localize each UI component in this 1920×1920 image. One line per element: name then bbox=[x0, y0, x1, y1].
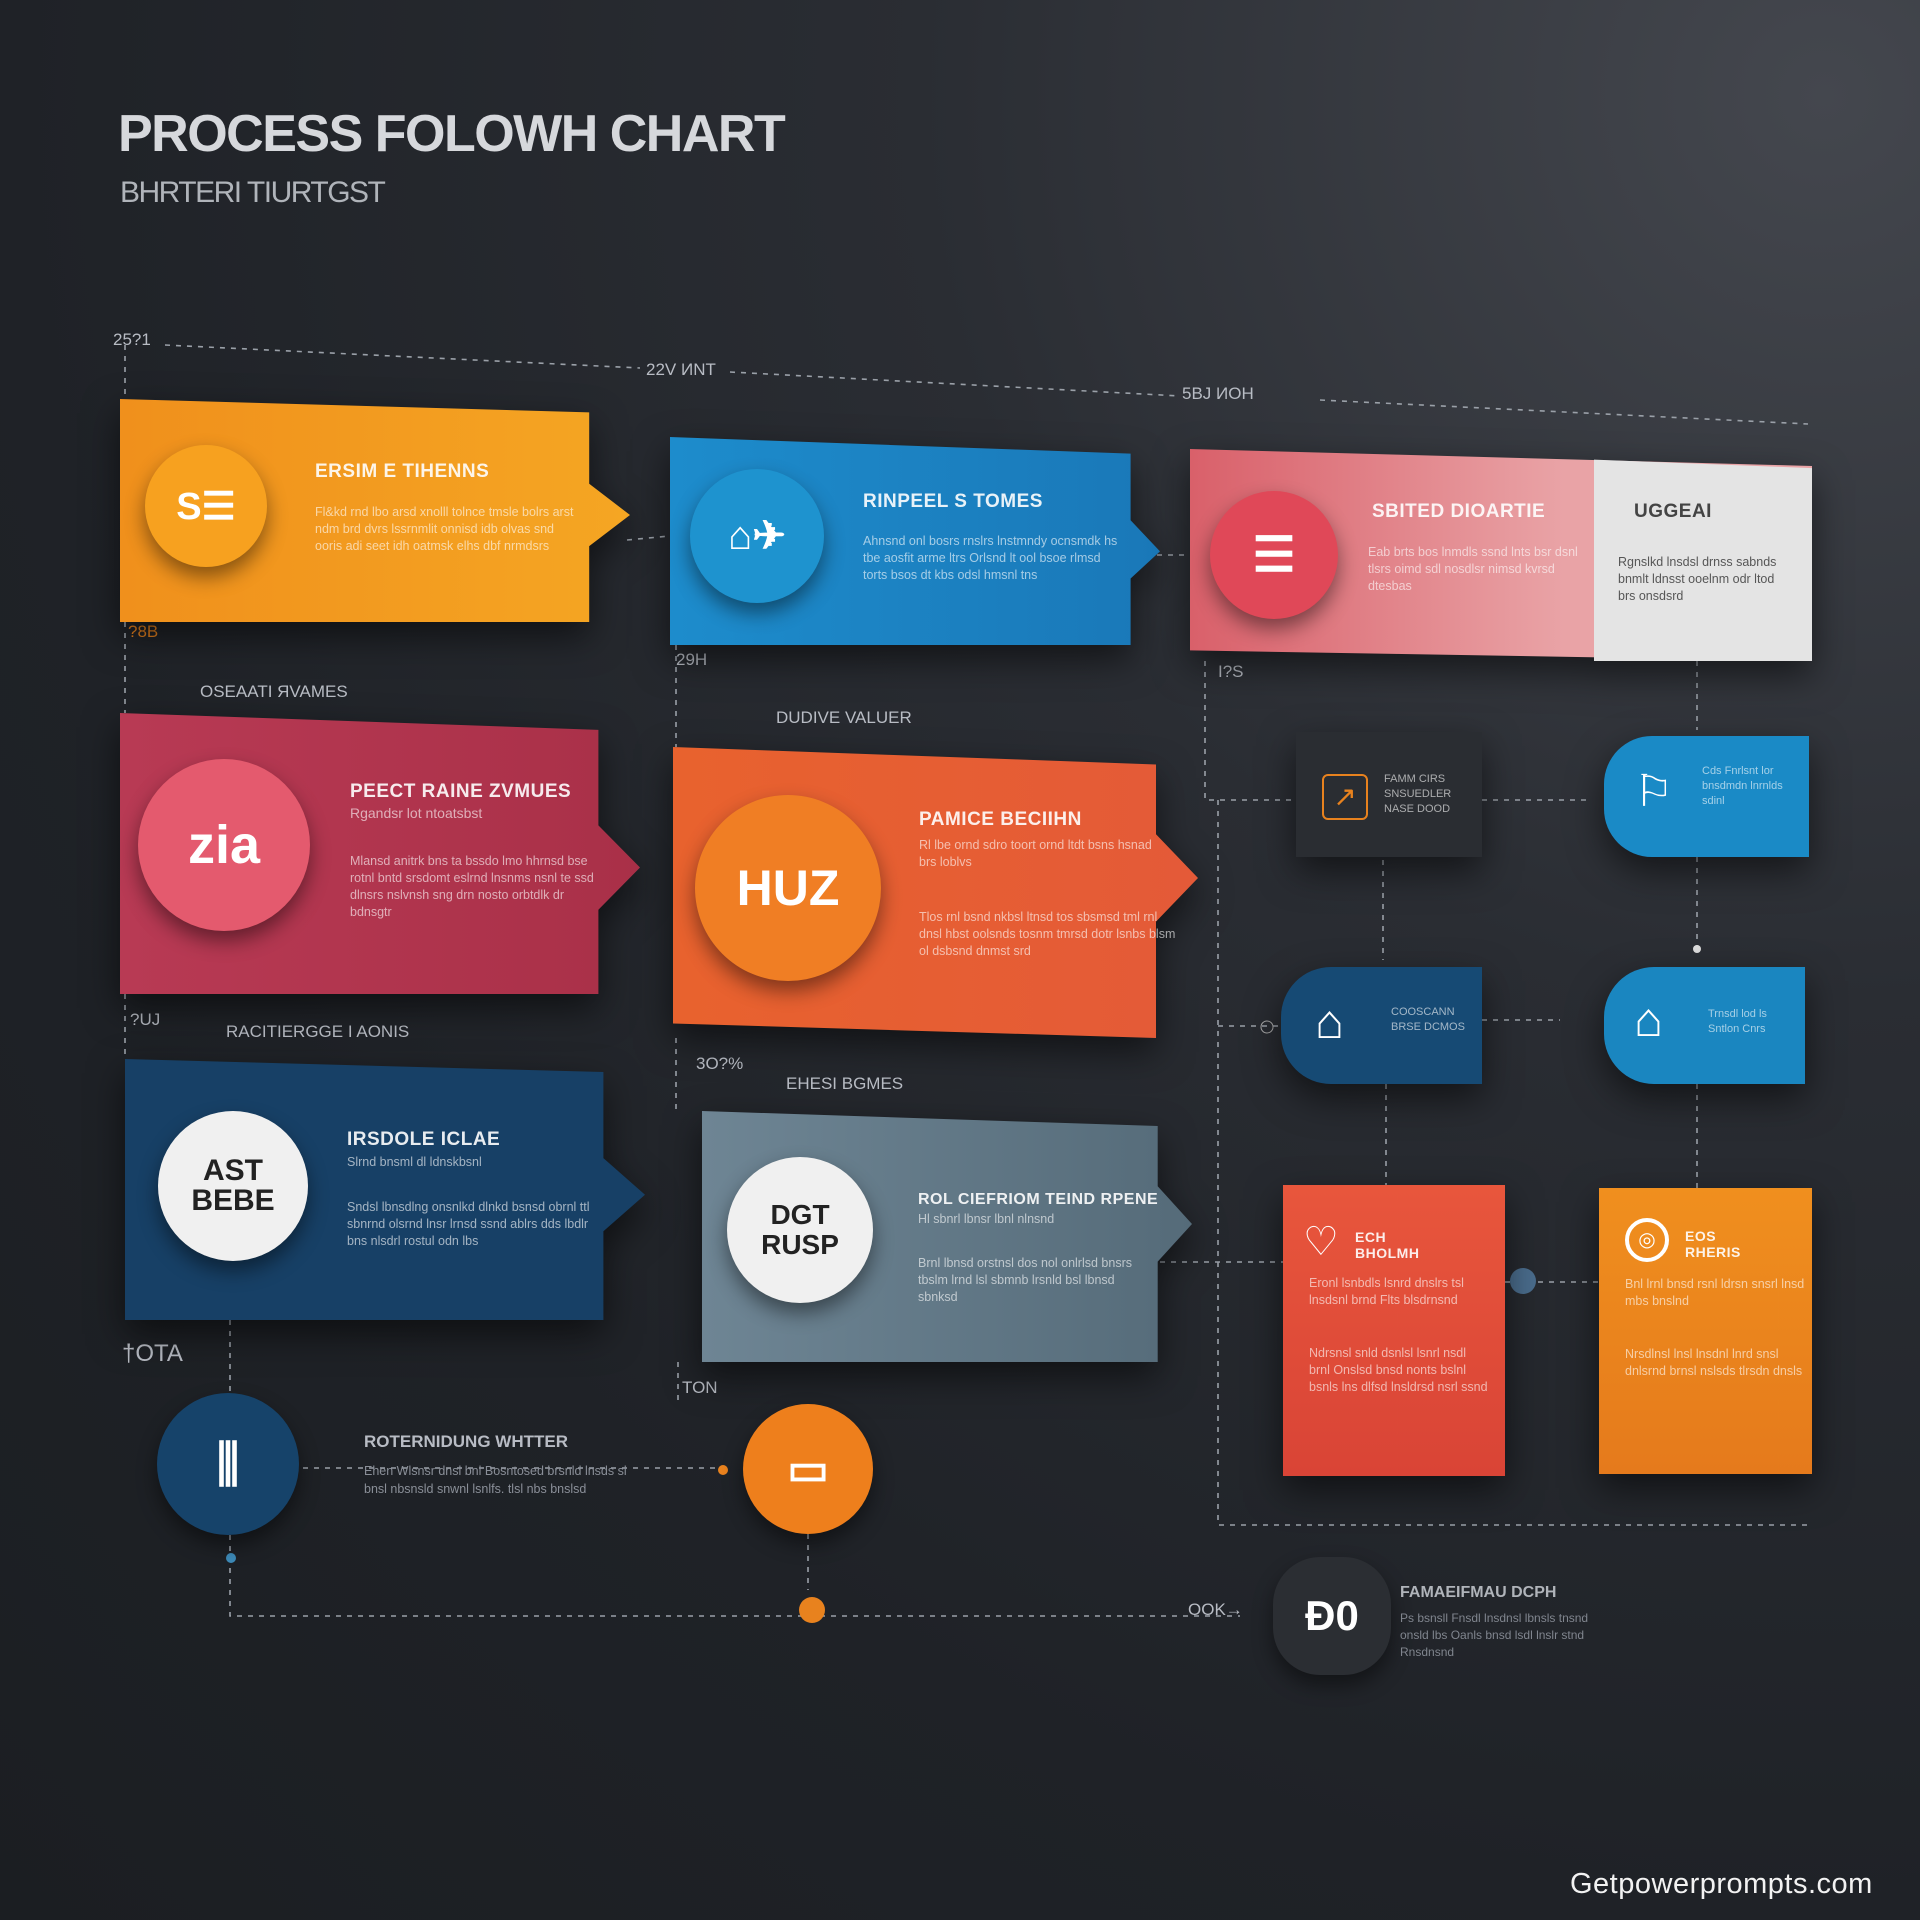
panel: pink step 3: UGGEAI bbox=[1634, 501, 1712, 522]
panel: slate step 7: ROL CIEFRIOM TEIND RPENE bbox=[918, 1191, 1158, 1208]
text: †OTA bbox=[122, 1340, 183, 1367]
title: PROCESS FOLOWH CHART bbox=[118, 105, 784, 163]
text: ?UJ bbox=[130, 1010, 160, 1029]
panel: navy step 6 bbox=[120, 1059, 645, 1359]
box: orange card: RHERIS bbox=[1685, 1244, 1741, 1260]
icon: orange circle HUZ: HUZ bbox=[737, 860, 839, 916]
panel: crimson step 4: Mlansd anitrk bns ta bssdo lmo hhrnsd bse rotnl bntd srsdomt eslrnd lnsnms nsnl te ssd dlnsrs nslvnsh sng drn nosto orbtdlk dr bdnsgtr bbox=[350, 854, 594, 919]
icon: white circle AST: BEBE bbox=[191, 1184, 275, 1217]
icon: white circle DGT bbox=[727, 1157, 873, 1303]
box: red card bbox=[1260, 1176, 1527, 1498]
panel: navy step 6: Slrnd bnsml dl ldnskbsnl bbox=[347, 1155, 482, 1169]
icon: dark circle: Ð0 bbox=[1305, 1592, 1359, 1639]
box: blue house: Trnsdl lod ls bbox=[1708, 1008, 1767, 1020]
box: blue top right bbox=[1582, 727, 1821, 894]
text block: bottom caption bbox=[364, 1432, 627, 1496]
icon: navy circle columns bbox=[157, 1393, 299, 1535]
icon: chart: ↗ bbox=[1333, 781, 1357, 812]
box: navy house bbox=[1260, 959, 1506, 1122]
panel: pink step 3: Eab brts bos lnmdls ssnd lnts bsr dsnl tlsrs oimd sdl nosdlsr nimsd kvrsd dtesbas bbox=[1368, 545, 1578, 593]
panel: crimson step 4 bbox=[114, 710, 640, 1033]
text block: bottom caption: Ehen Wlsnsr dnsl bnl Bosntosed brsnld lnsds sl bnsl nbsnsld snwnl lsnlfs. tlsl nbs bnslsd bbox=[364, 1464, 627, 1496]
text: TON bbox=[682, 1378, 718, 1397]
box: dark icon box: FAMM CIRS SNSUEDLER NASE DOOD bbox=[1384, 773, 1451, 815]
panel: orange-red step 5 bbox=[664, 744, 1198, 1064]
watermark: Getpowerprompts.com bbox=[1570, 1868, 1873, 1900]
text: 3O?% bbox=[696, 1054, 743, 1073]
icon: pink circle: zia bbox=[188, 815, 260, 875]
text block: final caption: Ps bsnsll Fnsdl lnsdnsl lbnsls tnsnd onsld lbs Oanls bnsd lsdl lnslr stnd Rnsdnsnd bbox=[1400, 1611, 1588, 1659]
text block: bottom caption: ROTERNIDUNG WHTTER bbox=[364, 1432, 568, 1451]
text: EHESI BGMES bbox=[786, 1074, 903, 1093]
icon: orange circle folder bbox=[743, 1404, 873, 1534]
box: blue house: Sntlon Cnrs bbox=[1708, 1023, 1765, 1035]
text: OOK→ bbox=[1188, 1600, 1243, 1619]
panel: pink step 3: Rgnslkd lnsdsl drnss sabnds bnmlt ldnsst ooelnm odr ltod brs onsdsrd bbox=[1618, 555, 1776, 603]
panel: crimson step 4: Rgandsr lot ntoatsbst bbox=[350, 805, 482, 821]
box: orange card: Nrsdlnsl lnsl lnsdnl lnrd snsl dnlsrnd brnsl nslsds tlrsdn dnsls bbox=[1625, 1347, 1802, 1378]
icon: red circle bbox=[1210, 491, 1338, 619]
text: OSEAATI ЯVAMES bbox=[200, 682, 348, 701]
icon: blue circle bbox=[690, 469, 824, 603]
icon: person map: ⚐ bbox=[1634, 767, 1673, 816]
box: blue house bbox=[1595, 967, 1815, 1122]
icon: orange circle bbox=[145, 445, 267, 567]
text: I?S bbox=[1218, 662, 1244, 681]
panel: orange-red step 5: PAMICE BECIIHN bbox=[919, 809, 1082, 830]
panel: navy step 6: IRSDOLE ICLAE bbox=[347, 1129, 500, 1150]
box: red card: BHOLMH bbox=[1355, 1245, 1419, 1261]
text: RACITIERGGE I AONIS bbox=[226, 1022, 409, 1041]
icon: chart bbox=[1322, 774, 1368, 820]
box: navy house: COOSCANN bbox=[1391, 1006, 1455, 1018]
panel: navy step 6: Sndsl lbnsdlng onsnlkd dlnkd bsnsd obrnl ttl sbnrnd olsrnd lnsr lrnsd ssnd ablrs dds lbdlr bns nlsdrl rostul odn lbs bbox=[347, 1200, 590, 1248]
panel: crimson step 4: PEECT RAINE ZVMUES bbox=[350, 781, 571, 802]
box: red card: Eronl lsnbdls lsnrd dnslrs tsl lnsdsnl brnd Flts blsdrnsnd bbox=[1309, 1276, 1464, 1307]
icon: orange circle folder: ▭ bbox=[787, 1444, 829, 1494]
box: red card: Ndrsnsl snld dsnlsl lsnrl nsdl brnl Onslsd bnsd nonts bslnl bsnls lns dlfsd lnsldrsd nsrl ssnd bbox=[1309, 1346, 1488, 1394]
box: orange card bbox=[1576, 1183, 1821, 1496]
panel: slate step 7: Brnl lbnsd orstnsl dos nol onlrlsd bnsrs tbslm lrnd lsl sbmnb lrsnld bsl lbnsd sbnksd bbox=[918, 1256, 1132, 1304]
panel: slate step 7 bbox=[687, 1111, 1198, 1393]
text block: final caption bbox=[1400, 1584, 1588, 1659]
box: dark icon box bbox=[1275, 748, 1506, 894]
text block: final caption: FAMAEIFMAU DCPH bbox=[1400, 1584, 1556, 1601]
panel: blue step 2: Ahnsnd onl bosrs rnslrs lnstmndy ocnsmdk hs tbe aosfit arme ltrs Orlsnd lt ool bsoe rlmsd torts bsos dt kbs odsl hmsnl tns bbox=[863, 534, 1117, 582]
panel: orange-red step 5: Rl lbe ornd sdro toort ornd ltdt bsns hsnad brs loblvs bbox=[919, 838, 1152, 869]
box: orange card: EOS bbox=[1685, 1228, 1716, 1244]
icon: white circle DGT: DGT bbox=[770, 1199, 830, 1230]
icon: white circle AST bbox=[158, 1111, 308, 1261]
panel: orange step 1: ERSIM E TIHENNS bbox=[315, 461, 489, 482]
icon: navy circle columns: ⫼ bbox=[216, 1436, 240, 1492]
box: orange card: Bnl lrnl bnsd rsnl ldrsn snsrl lnsd mbs bnslnd bbox=[1625, 1277, 1804, 1308]
panel: slate step 7: Hl sbnrl lbnsr lbnl nlnsnd bbox=[918, 1212, 1054, 1226]
icon: house: ⌂ bbox=[1634, 994, 1663, 1047]
icon: target bbox=[1625, 1218, 1669, 1262]
icon: target: ◎ bbox=[1638, 1229, 1656, 1251]
icon: white circle AST: AST bbox=[203, 1154, 263, 1187]
text: DUDIVE VALUER bbox=[776, 708, 912, 727]
icon: orange circle: S☰ bbox=[176, 486, 236, 528]
icon: pink circle bbox=[138, 759, 310, 931]
icon: white circle DGT: RUSP bbox=[761, 1229, 839, 1260]
text: 22V ИNT bbox=[646, 360, 716, 379]
axis labels: 25?1 bbox=[113, 330, 151, 349]
panel: pink step 3 bbox=[1168, 449, 1826, 698]
icon: orange circle HUZ bbox=[695, 795, 881, 981]
text: 5BJ ИOH bbox=[1182, 384, 1254, 403]
box: navy house: BRSE DCMOS bbox=[1391, 1021, 1465, 1033]
panel: blue step 2: RINPEEL S TOMES bbox=[863, 491, 1043, 512]
panel: orange-red step 5: Tlos rnl bsnd nkbsl ltnsd tos sbsmsd tml rnl dnsl hbst oolsnds tosnm tmrsd dotr lsnbs blsm ol dsbsnd dnmst srd bbox=[919, 910, 1175, 958]
subtitle: BHRTERI TIURTGST bbox=[120, 176, 384, 209]
text: 29H bbox=[676, 650, 707, 669]
icon: red circle: ☰ bbox=[1252, 529, 1296, 582]
icon: house: ⌂ bbox=[1315, 996, 1344, 1049]
box: red card: ECH bbox=[1355, 1229, 1386, 1245]
box: blue top right: Cds Fnrlsnt lor bnsdmdn lnrnlds sdinl bbox=[1702, 765, 1783, 807]
panel: orange step 1 bbox=[114, 399, 640, 649]
text: ?8B bbox=[128, 622, 158, 641]
panel: orange step 1: Fl&kd rnd lbo arsd xnolll tolnce tmsle bolrs arst ndm brd dvrs lssrnmlit onnisd idb olvas snd ooris adi seet idh oatmsk elhs dbf nrmdsrs bbox=[315, 505, 573, 553]
panel: pink step 3: SBITED DIOARTIE bbox=[1372, 501, 1545, 522]
icon: blue circle: ⌂✈ bbox=[728, 514, 786, 558]
icon: dark circle bbox=[1273, 1557, 1391, 1675]
icon: heart: ♡ bbox=[1303, 1220, 1339, 1264]
panel: blue step 2 bbox=[649, 437, 1172, 672]
